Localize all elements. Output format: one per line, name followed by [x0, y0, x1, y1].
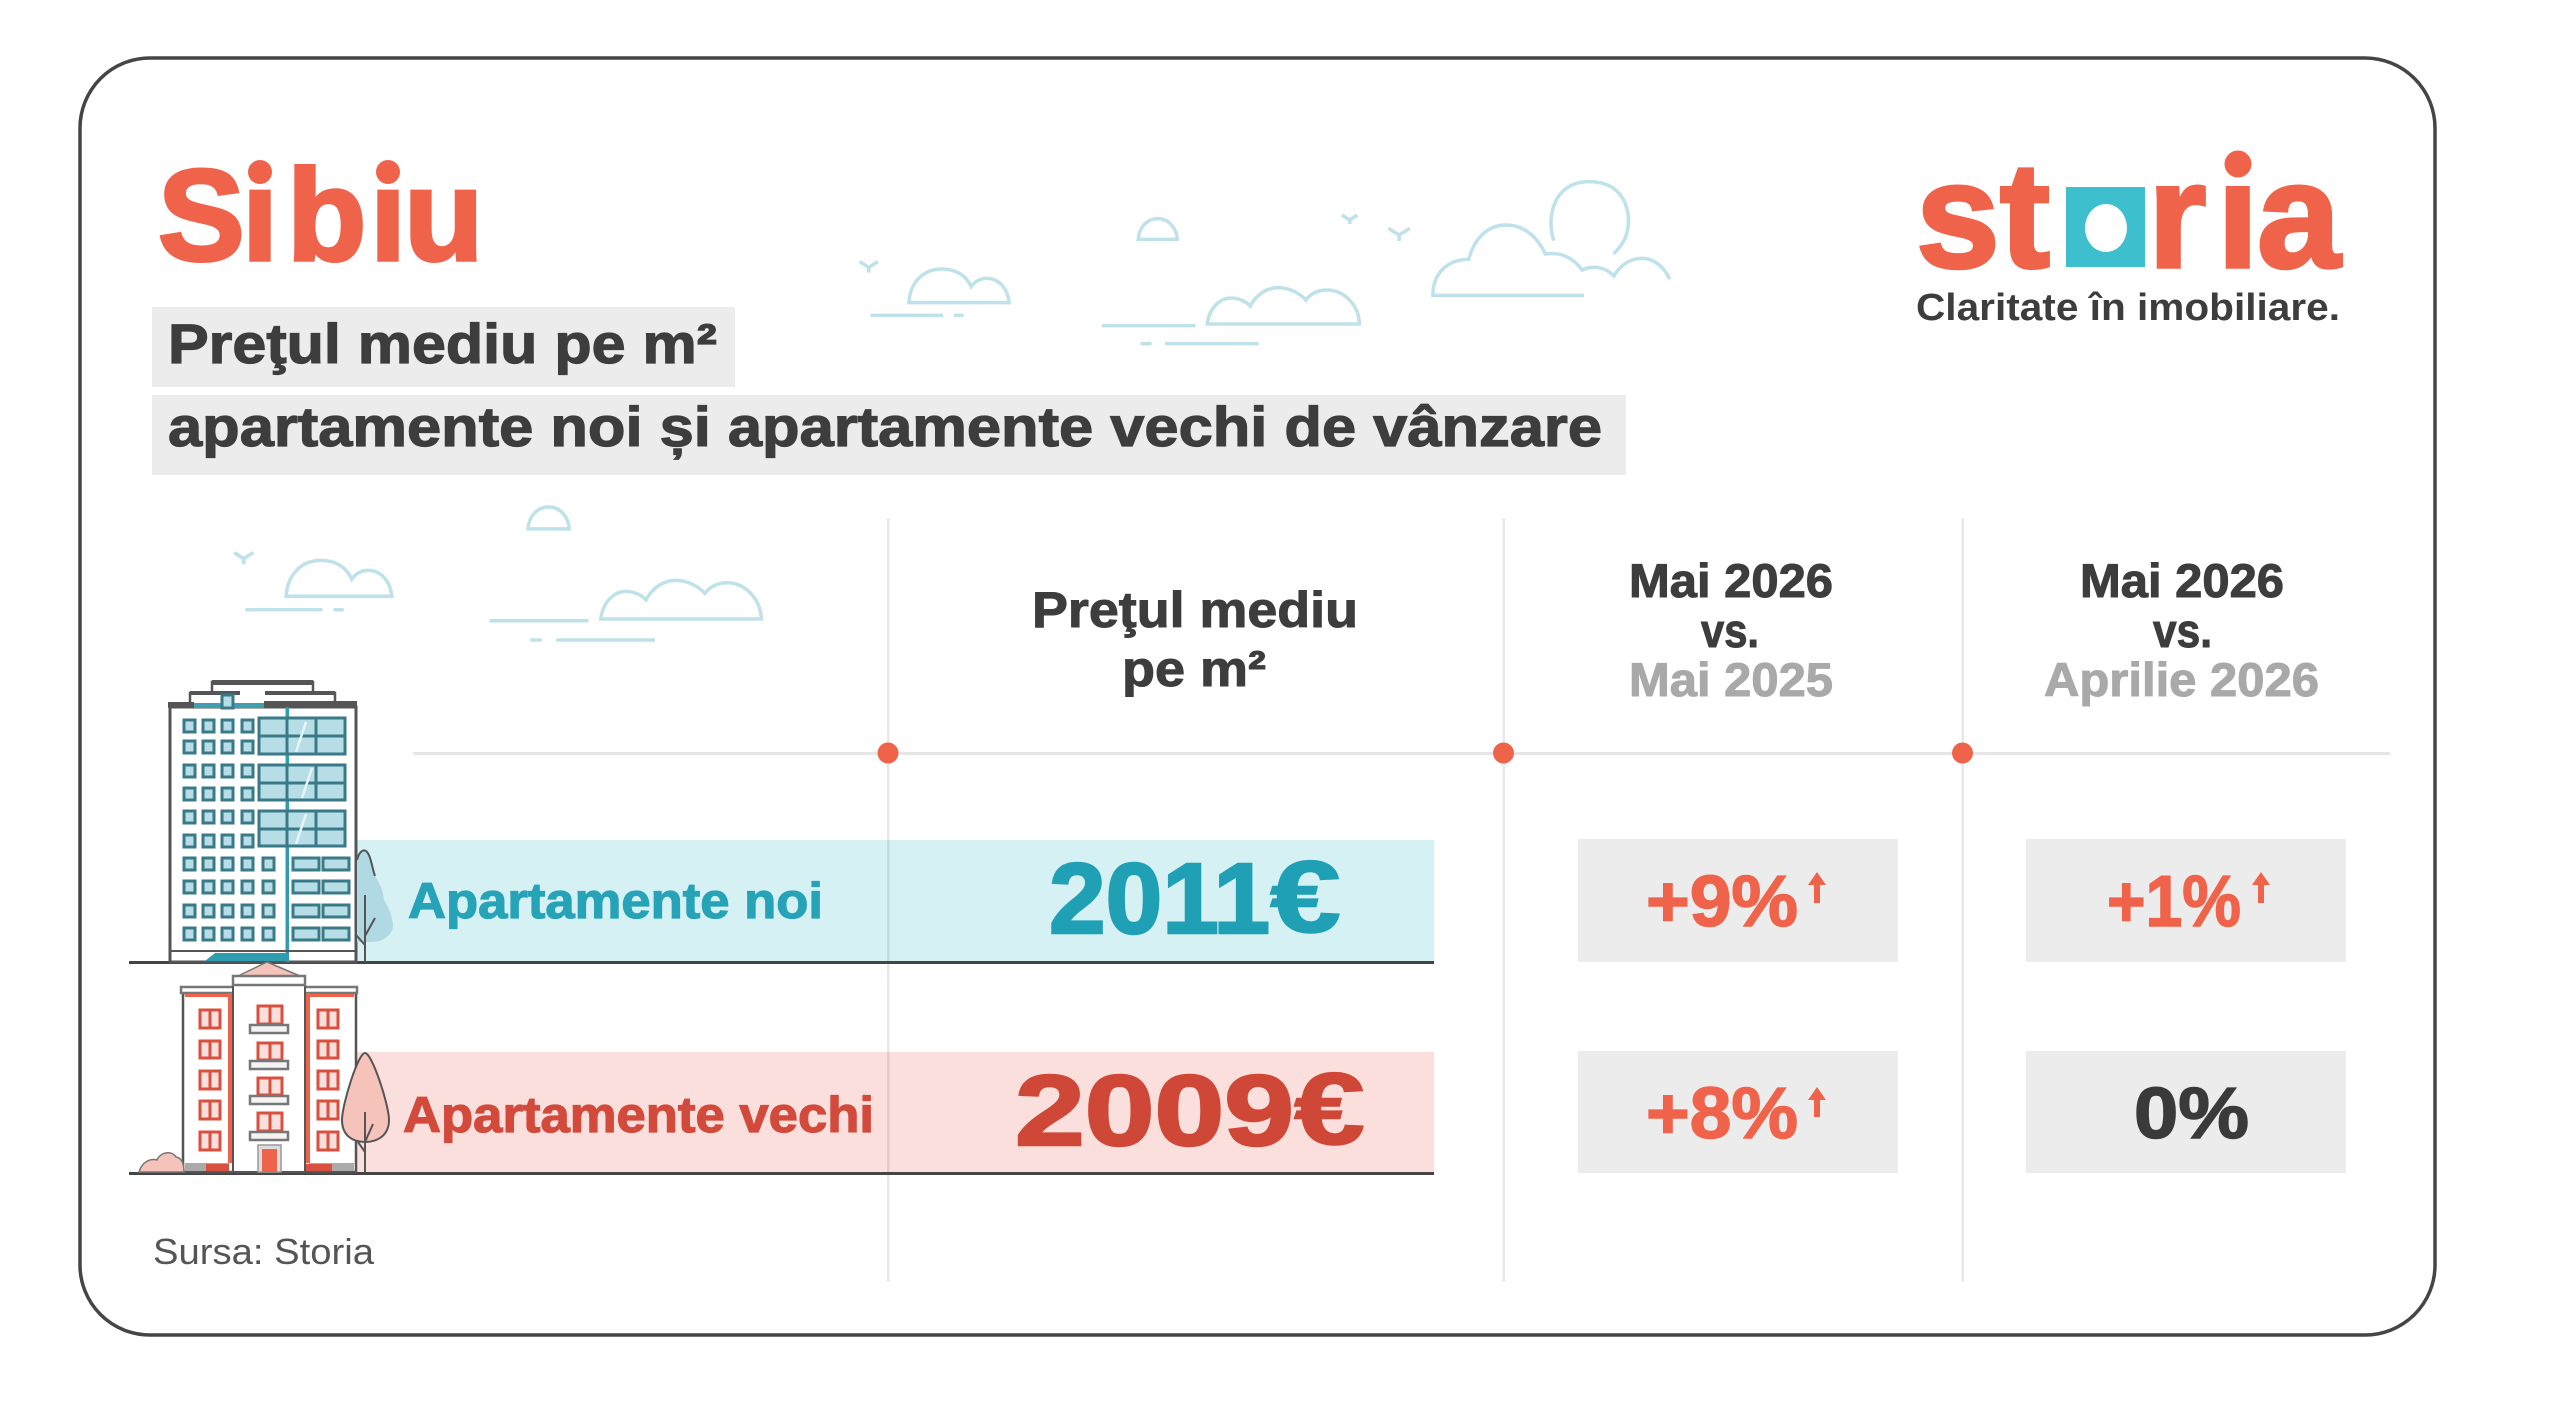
- column header: mai 2026 vs aprilie 2026: Mai 2026: [2080, 554, 2284, 607]
- column header: mai 2026 vs mai 2025: [1629, 554, 1833, 706]
- subtitle block: [152, 307, 1626, 475]
- price: apartamente noi: €: [1270, 840, 1341, 954]
- band: apartamente noi: [357, 840, 1434, 962]
- column header: mai 2026 vs mai 2025: Mai 2025: [1629, 653, 1833, 706]
- subtitle block: apartamente noi și apartamente vechi de vânzare: [168, 395, 1602, 459]
- icon: teal tree: [356, 850, 393, 962]
- icon: bush: [139, 1153, 184, 1172]
- change cell: noi monthly: +1%: [2107, 862, 2241, 942]
- logo: storia: ria: [2148, 131, 2342, 299]
- source note: Sursa: Storia: [153, 1231, 375, 1272]
- logo: storia: [1916, 131, 2342, 329]
- row label: apartamente vechi: Apartamente vechi: [403, 1087, 874, 1143]
- band: apartamente vechi: [357, 1052, 1434, 1172]
- column header: mai 2026 vs aprilie 2026: vs.: [2153, 604, 2212, 657]
- price: apartamente vechi: €: [1294, 1052, 1365, 1166]
- icon: new apartment tower: [168, 680, 357, 962]
- change cell: vechi yearly: +8%: [1646, 1074, 1798, 1154]
- column header: mai 2026 vs aprilie 2026: [2044, 554, 2319, 706]
- change cell: noi yearly: [1578, 839, 1898, 962]
- row label: apartamente noi: Apartamente noi: [408, 873, 823, 929]
- column header: mai 2026 vs mai 2025: vs.: [1701, 604, 1759, 657]
- table grid lines: [413, 518, 2390, 1282]
- column header: mai 2026 vs mai 2025: Mai 2026: [1629, 554, 1833, 607]
- price: apartamente noi: 2011: [1049, 843, 1270, 955]
- price: apartamente vechi: 2009: [1015, 1055, 1294, 1167]
- column header: pretul mediu: pe m²: [1122, 641, 1266, 697]
- price: apartamente vechi: [1015, 1052, 1365, 1167]
- title: Sibiu: [158, 142, 483, 288]
- icon: pink tree: [342, 1053, 389, 1172]
- change cell: vechi monthly: [2026, 1051, 2346, 1173]
- change cell: vechi yearly: [1578, 1051, 1898, 1173]
- change cell: noi yearly: +9%: [1646, 862, 1798, 942]
- column header: mai 2026 vs aprilie 2026: Aprilie 2026: [2044, 653, 2319, 706]
- ground lines: [129, 961, 1434, 1175]
- illustration: top clouds: [860, 182, 1670, 344]
- column header: pretul mediu: Preţul mediu: [1032, 582, 1358, 638]
- change cell: vechi monthly: 0%: [2134, 1074, 2249, 1154]
- icon: old apartment building: [181, 962, 357, 1172]
- subtitle block: Preţul mediu pe m²: [168, 312, 717, 375]
- logo tagline: Claritate în imobiliare.: [1916, 287, 2340, 329]
- change cell: noi monthly: [2026, 839, 2346, 962]
- illustration: left clouds: [234, 507, 761, 640]
- logo: storia: st: [1916, 131, 2050, 299]
- column header: pretul mediu: [1032, 582, 1358, 697]
